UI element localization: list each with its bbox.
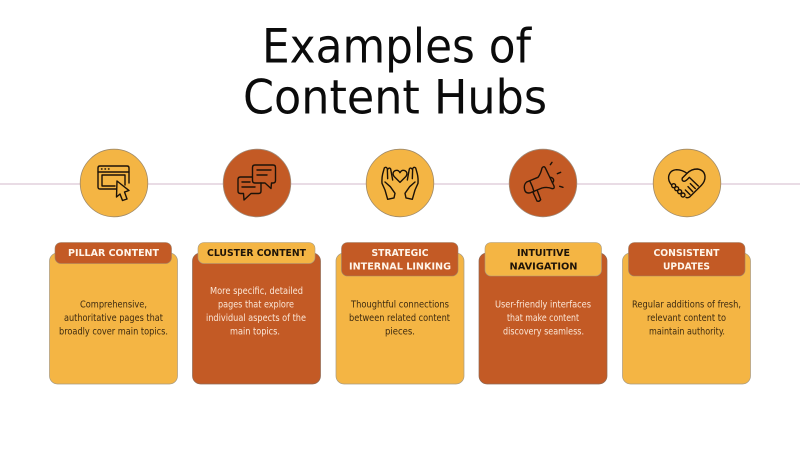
card: pillar content [50,253,178,384]
card: intuitive navigation [479,253,607,384]
title: Examples of [262,19,532,74]
icon: browser window with cursor [80,149,148,217]
text: pillar content description: broadly cover main topics. [59,326,168,338]
text: strategic internal linking description [349,300,450,338]
icon: speech bubbles [223,149,291,217]
heading pill: pillar content [55,242,172,264]
step 1: pillar content [50,149,178,384]
heading pill: intuitive navigation [485,242,602,276]
text: strategic internal linking description: pieces. [385,326,415,338]
heading pill: cluster content [198,242,315,264]
text: intuitive navigation description: that make content [507,313,579,324]
title: Content Hubs [243,70,547,125]
text: strategic internal linking description: between related content [349,313,450,324]
card: consistent updates [622,253,750,384]
card: cluster content [192,253,320,384]
text: consistent updates description: relevant content to [647,313,726,324]
text: consistent updates description [632,300,741,338]
heading pill: strategic internal linking: INTERNAL LINKING [349,262,451,272]
text: intuitive navigation description [495,300,591,338]
text: pillar content description: authoritative pages that [64,313,163,324]
text: consistent updates description: maintain authority. [649,326,725,338]
step 2: cluster content [192,149,320,384]
text: pillar content description: Comprehensive, [80,300,147,310]
text: consistent updates description: Regular additions of fresh, [632,300,741,310]
heading pill: cluster content: CLUSTER CONTENT [207,248,306,259]
heading pill: strategic internal linking: STRATEGIC [372,248,428,259]
text: pillar content description [59,300,168,338]
title [243,19,547,125]
text: intuitive navigation description: discovery seamless. [503,326,584,338]
heading pill: pillar content: PILLAR CONTENT [68,248,159,259]
text: intuitive navigation description: User-friendly interfaces [495,300,591,310]
text: cluster content description: More specific, detailed [210,286,303,297]
heading pill: consistent updates [628,242,745,276]
heading pill: strategic internal linking [342,242,458,276]
text: cluster content description: pages that explore [218,300,294,310]
heading pill: intuitive navigation: INTUITIVE [517,248,570,259]
step 5: consistent updates [622,149,750,384]
heading pill: consistent updates: CONSISTENT [654,248,720,259]
icon: heart handshake [653,149,721,217]
text: cluster content description: main topics. [230,326,280,338]
icon: hands holding heart [366,149,434,217]
text: strategic internal linking description: Thoughtful connections [350,300,449,310]
text: cluster content description [206,286,306,338]
icon: megaphone [509,149,577,217]
step 4: intuitive navigation [479,149,607,384]
heading pill: consistent updates: UPDATES [663,262,710,272]
heading pill: intuitive navigation: NAVIGATION [510,262,578,272]
card: strategic internal linking [336,253,464,384]
step 3: strategic internal linking [336,149,464,384]
text: cluster content description: individual aspects of the [206,313,306,324]
